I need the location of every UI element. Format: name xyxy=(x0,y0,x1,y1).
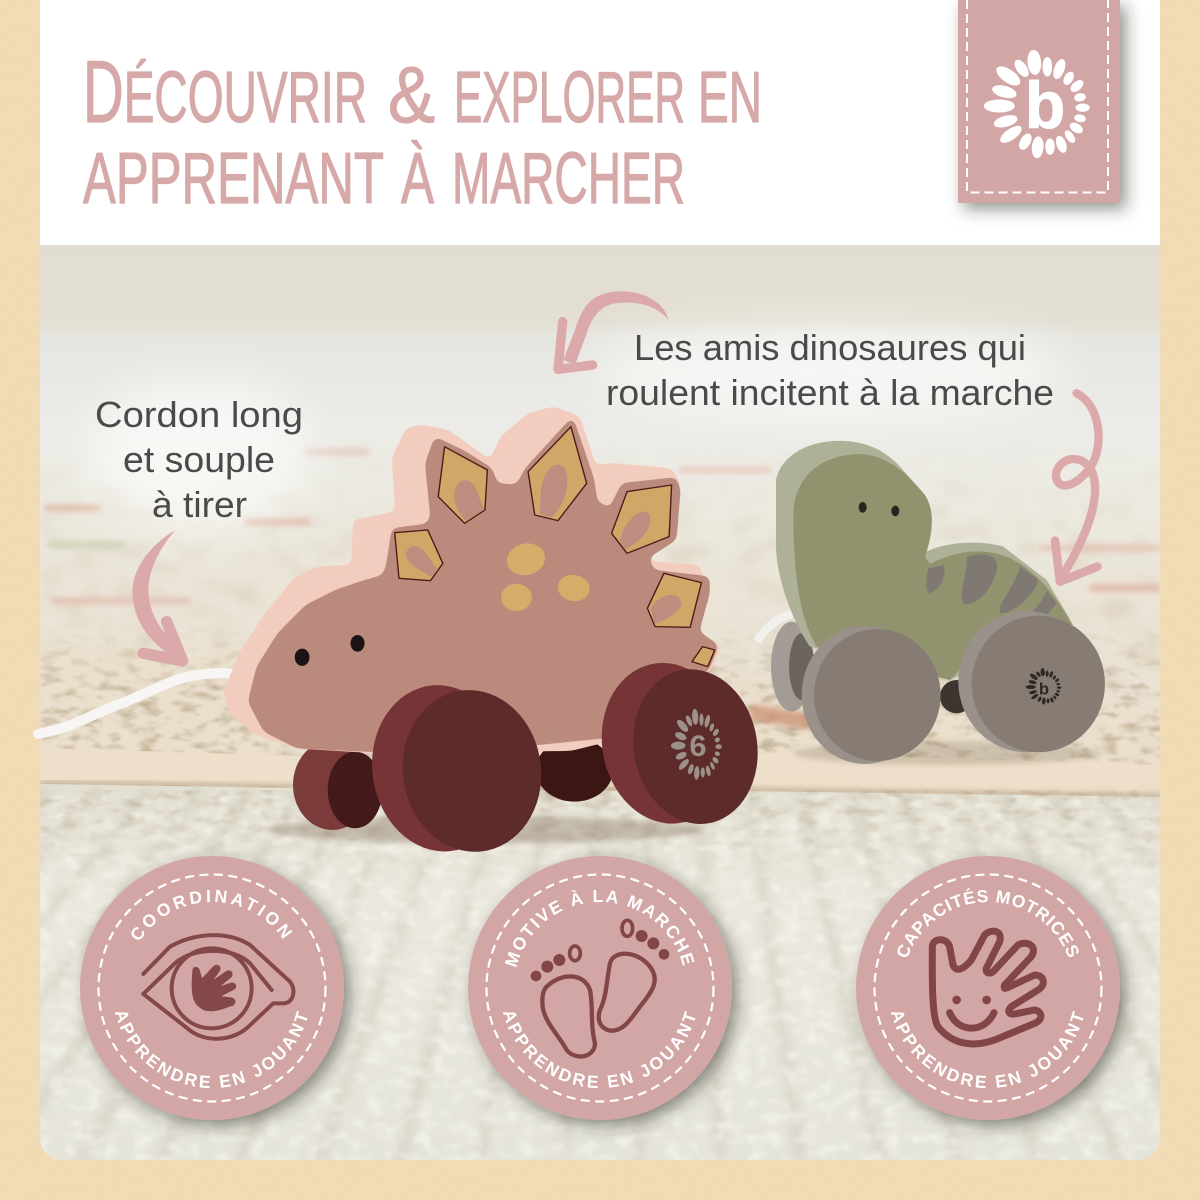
badge: motive a la marche xyxy=(463,851,749,1137)
arrow: to pull cord xyxy=(132,531,183,661)
title: À xyxy=(401,139,434,219)
badge: capacites motrices: CAPACITÉS MOTRICES xyxy=(898,888,1079,957)
wheel logo: 6 xyxy=(689,731,707,763)
white glow behind labels xyxy=(90,327,1065,530)
cord between toys xyxy=(757,613,793,642)
brand tag with logo: b xyxy=(1025,68,1065,142)
title: DÉCOUVRIR xyxy=(83,42,367,141)
header panel xyxy=(40,0,1160,246)
badge: motive a la marche: APPRENDRE EN JOUANT xyxy=(502,1010,696,1088)
label: long cord xyxy=(95,394,303,525)
badge: capacites motrices: APPRENDRE EN JOUANT xyxy=(890,1010,1084,1088)
arrow: looping to green dinosaur xyxy=(1055,393,1098,582)
title: EN xyxy=(698,58,762,138)
inner wheel xyxy=(940,680,973,713)
title: APPRENANT xyxy=(83,139,384,219)
arrow: to dinosaurs from top xyxy=(558,291,668,369)
badge: motive a la marche: MOTIVE À LA MARCHE xyxy=(504,890,694,968)
pull cord xyxy=(38,673,242,734)
title: & xyxy=(388,50,435,139)
body face xyxy=(793,454,1072,680)
brand tag with logo xyxy=(958,0,1120,203)
label: rolling friends: roulent incitent à la marche xyxy=(606,372,1054,413)
title xyxy=(83,42,762,219)
eyes xyxy=(859,502,899,516)
label: rolling friends: Les amis dinosaures qui xyxy=(634,327,1026,368)
badge: coordination xyxy=(74,851,361,1137)
ribbed floor rug xyxy=(0,784,1200,1160)
body side xyxy=(224,407,720,753)
ground shadow xyxy=(269,817,704,843)
label: long cord: et souple xyxy=(123,439,275,480)
wheel logo xyxy=(671,709,722,780)
green dinosaur toy xyxy=(757,441,1105,765)
front wheels xyxy=(802,611,1105,764)
rug edge xyxy=(40,748,1160,796)
plates xyxy=(395,427,715,667)
ground shadow xyxy=(793,742,1100,765)
wheel logo: b xyxy=(1039,680,1049,699)
badge: coordination: APPRENDRE EN JOUANT xyxy=(114,1010,308,1088)
label: long cord: Cordon long xyxy=(95,394,303,435)
eyes xyxy=(295,635,365,666)
icon: smiling hand xyxy=(932,931,1043,1044)
plate inner marks xyxy=(406,465,681,624)
badge: coordination: COORDINATION xyxy=(132,890,292,940)
icon: footprints xyxy=(531,920,669,1057)
body side xyxy=(776,441,1073,680)
label: long cord: à tirer xyxy=(152,484,247,525)
title: MARCHER xyxy=(452,139,685,219)
rear wheels xyxy=(293,738,613,830)
body face xyxy=(248,417,718,752)
front left wheel xyxy=(363,679,550,858)
panel: product photo xyxy=(0,245,1200,1160)
shaggy rug xyxy=(40,440,1160,800)
title: EXPLORER xyxy=(454,58,685,138)
badge: capacites motrices xyxy=(851,851,1137,1137)
icon: eye with hand xyxy=(143,935,293,1039)
wall and blurred rug backdrop xyxy=(40,245,1160,805)
front right wheel xyxy=(591,655,768,832)
label: rolling friends xyxy=(606,327,1054,413)
wheel logo xyxy=(1026,668,1061,705)
rear wheel xyxy=(771,622,814,712)
back spots xyxy=(501,539,592,611)
body stripes xyxy=(926,554,1057,615)
pink stegosaurus toy xyxy=(224,407,768,858)
